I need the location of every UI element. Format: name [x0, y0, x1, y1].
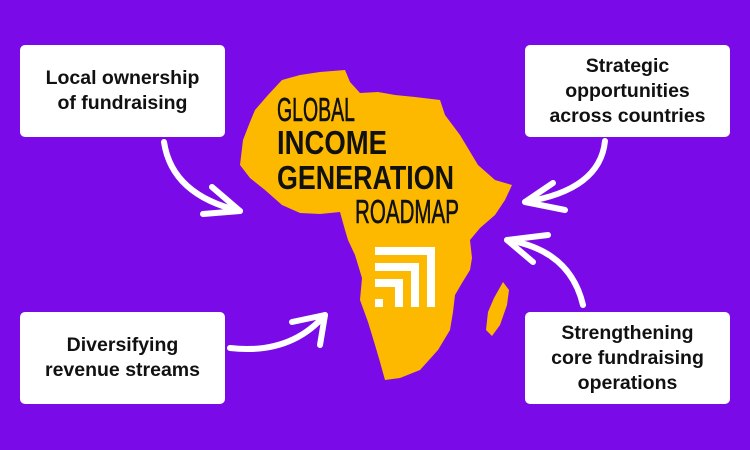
box: strengthening operations: [525, 312, 730, 404]
box: strategic opportunities: across countries: [549, 104, 706, 126]
title: ROADMAP: [355, 193, 459, 230]
box: local ownership: of fundraising: [57, 92, 187, 114]
box: strategic opportunities: opportunities: [565, 80, 690, 102]
title: GENERATION: [277, 159, 454, 196]
box: strategic opportunities: Strategic: [586, 54, 669, 76]
box: local ownership: [20, 45, 225, 137]
map: Madagascar: [486, 282, 509, 336]
box: strengthening operations: Strengthening: [561, 322, 694, 344]
box: strengthening operations: core fundraising: [551, 346, 704, 368]
arrow: bottom-left: [230, 315, 325, 349]
arrow: bottom-right: [507, 235, 583, 305]
arrow: top-right: [525, 141, 605, 210]
box: diversifying revenue: revenue streams: [45, 359, 200, 381]
box: local ownership: Local ownership: [46, 67, 199, 89]
box: strengthening operations: operations: [578, 372, 677, 394]
box: diversifying revenue: [20, 312, 225, 404]
title: INCOME: [277, 124, 387, 161]
icon: logo brackets: [375, 247, 435, 307]
title: [277, 91, 459, 230]
box: strategic opportunities: [525, 45, 730, 137]
arrow: top-left: [164, 142, 240, 214]
title: GLOBAL: [277, 91, 355, 128]
box: diversifying revenue: Diversifying: [67, 334, 178, 356]
map: Africa: [240, 70, 512, 380]
